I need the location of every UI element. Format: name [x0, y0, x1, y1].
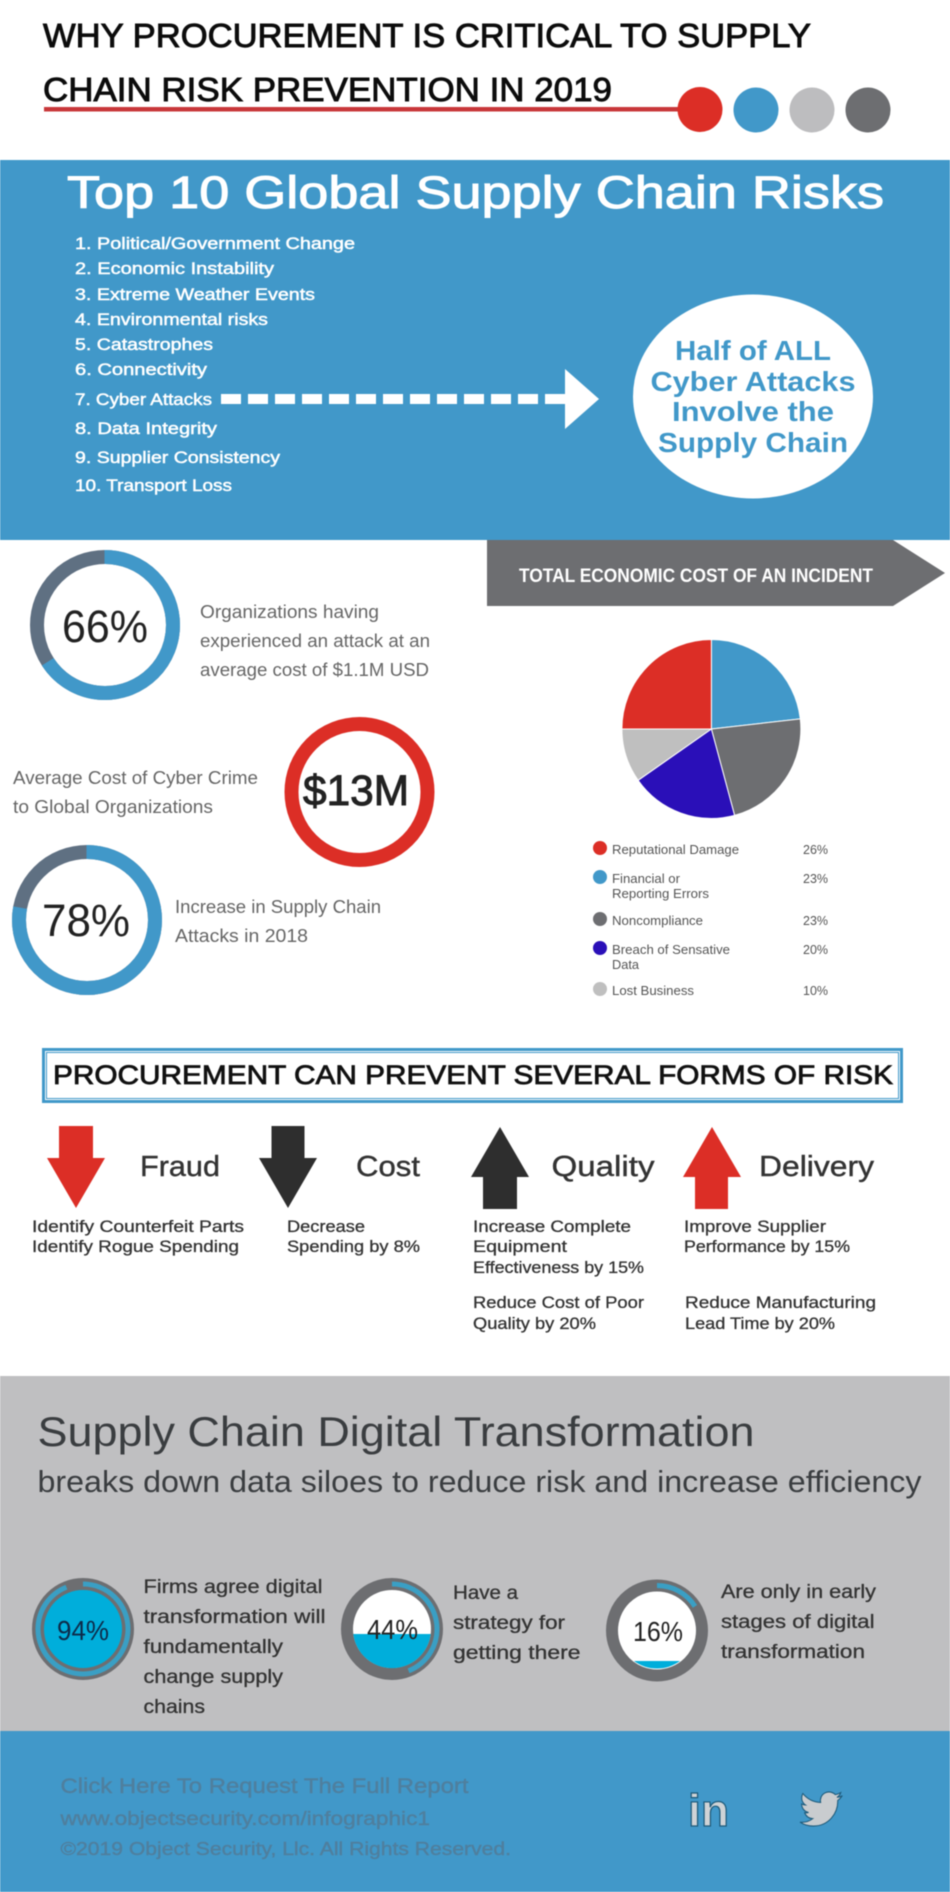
pie legend: Breach of Sensative — [612, 942, 730, 957]
text: 94 percent description — [144, 1577, 326, 1718]
risk list: 5. Catastrophes — [75, 335, 213, 354]
gauge: 16 percent — [612, 1586, 702, 1676]
gauge: 16 percent: 16% — [633, 1616, 683, 1647]
gauge: 44 percent — [347, 1584, 437, 1674]
text: delivery details: Reduce Manufacturing — [685, 1293, 876, 1312]
stat: 13M cost — [13, 724, 428, 860]
pie legend: 10% — [803, 983, 828, 998]
text: footer links — [59, 1775, 511, 1859]
text: 16 percent description: transformation — [721, 1642, 865, 1663]
pie legend: Lost Business — [612, 983, 695, 998]
text: 66 percent description: Organizations having — [200, 602, 379, 622]
text: 94 percent description: change supply — [144, 1667, 284, 1688]
text: delivery details — [684, 1217, 876, 1333]
risk list — [75, 234, 355, 495]
heading: procurement can prevent risk — [44, 1050, 902, 1102]
risk list: 2. Economic Instability — [75, 259, 275, 278]
text: quality details: Effectiveness by 15% — [473, 1258, 644, 1277]
gauge: 44 percent: 44% — [367, 1614, 418, 1645]
text: 94 percent description: transformation will — [144, 1607, 326, 1628]
gauge: 94 percent — [38, 1584, 128, 1674]
risk list: 3. Extreme Weather Events — [75, 285, 315, 304]
panel: top 10 risks — [0, 160, 950, 540]
stat: 66 percent — [37, 557, 430, 693]
arrow: dashed pointing to callout — [221, 369, 599, 429]
text: 94 percent description: chains — [144, 1697, 205, 1718]
text: 16 percent description: stages of digital — [721, 1612, 874, 1633]
pie legend: Noncompliance — [612, 913, 703, 928]
heading: digital transformation: Supply Chain Digital Transformation — [38, 1408, 755, 1455]
title: WHY PROCUREMENT IS CRITICAL TO SUPPLY — [43, 17, 811, 54]
banner: total economic cost — [487, 540, 945, 606]
text: 66 percent description — [200, 602, 430, 680]
text: 94 percent description: Firms agree digital — [144, 1577, 322, 1598]
text: quality details — [473, 1217, 644, 1333]
text: 94 percent description: fundamentally — [144, 1637, 284, 1658]
heading: top 10 risks: Top 10 Global Supply Chain Risks — [67, 167, 884, 218]
text: cost details: Spending by 8% — [287, 1237, 420, 1256]
text: delivery details: Improve Supplier — [684, 1217, 826, 1236]
arrow: delivery up — [683, 1127, 741, 1209]
stat: 13M cost: $13M — [303, 767, 409, 815]
text: footer links: www.objectsecurity.com/infographic1 — [59, 1809, 430, 1830]
stat: 78 percent — [19, 852, 381, 988]
title underline — [44, 107, 684, 112]
pie legend: Financial or — [612, 871, 681, 886]
arrow: quality up — [471, 1127, 529, 1209]
stat: 78 percent: 78% — [42, 895, 130, 946]
text: 44 percent description: Have a — [453, 1583, 518, 1604]
text: delivery details: Performance by 15% — [684, 1237, 850, 1256]
risk column: quality: Quality — [552, 1151, 655, 1183]
text: quality details: Increase Complete — [473, 1217, 631, 1236]
risk list: 4. Environmental risks — [75, 310, 268, 329]
risk column: fraud — [32, 1126, 244, 1256]
text: 66 percent description: experienced an attack at an — [200, 631, 430, 651]
pie legend: 23% — [803, 913, 828, 928]
text: 66 percent description: average cost of $1.1M USD — [200, 660, 429, 680]
pie legend: 23% — [803, 871, 828, 886]
header — [43, 17, 890, 132]
text: 44 percent description: getting there — [453, 1643, 580, 1664]
risk column: quality — [471, 1127, 655, 1333]
text: 13M description: Average Cost of Cyber Crime — [13, 768, 258, 788]
text: 44 percent description: strategy for — [453, 1613, 566, 1634]
panel: digital transformation — [0, 1376, 950, 1731]
risk list: 9. Supplier Consistency — [75, 448, 281, 467]
risk column: delivery: Delivery — [759, 1151, 875, 1183]
text: cost details: Decrease — [287, 1217, 365, 1236]
icon: twitter — [800, 1792, 842, 1826]
arrow: fraud down — [47, 1126, 105, 1208]
icon: linkedin: in — [688, 1785, 729, 1836]
pie legend: Reputational Damage — [612, 842, 739, 857]
risk list: 7. Cyber Attacks — [75, 390, 212, 409]
text: fraud details — [32, 1217, 244, 1256]
text: footer links: ©2019 Object Security, Llc. All Rights Reserved. — [60, 1839, 511, 1859]
risk list: 10. Transport Loss — [75, 476, 232, 495]
stat: 66 percent: 66% — [62, 601, 148, 652]
pie legend: 20% — [803, 942, 828, 957]
text: 13M description — [13, 768, 258, 817]
pie legend — [593, 841, 828, 998]
text: quality details: Reduce Cost of Poor — [473, 1293, 644, 1312]
text: 78 percent description: Increase in Supply Chain — [175, 897, 381, 917]
callout: half of all cyber attacks: Involve the — [672, 396, 834, 427]
gauge: 94 percent: 94% — [57, 1615, 109, 1646]
callout: half of all cyber attacks: Supply Chain — [658, 427, 848, 458]
callout: half of all cyber attacks — [633, 294, 873, 498]
panel: footer — [0, 1731, 950, 1892]
callout: half of all cyber attacks: Half of ALL — [675, 335, 831, 366]
pie legend: Reporting Errors — [612, 886, 710, 901]
pie legend: 26% — [803, 842, 828, 857]
text: 13M description: to Global Organizations — [13, 797, 213, 817]
text: fraud details: Identify Rogue Spending — [32, 1237, 239, 1256]
text: 16 percent description: Are only in early — [721, 1582, 877, 1603]
risk column: cost: Cost — [356, 1151, 420, 1183]
pie chart — [622, 640, 801, 818]
heading: procurement can prevent risk: PROCUREMENT CAN PREVENT SEVERAL FORMS OF RISK — [53, 1060, 893, 1090]
pie legend: Data — [612, 957, 640, 972]
text: 44 percent description — [453, 1583, 580, 1664]
risk column: cost — [259, 1126, 420, 1256]
decorative colour dots — [678, 87, 890, 132]
arrow: cost down — [259, 1126, 317, 1208]
risk column: delivery — [683, 1127, 876, 1333]
text: footer links: Click Here To Request The Full Report — [60, 1775, 469, 1798]
title: CHAIN RISK PREVENTION IN 2019 — [43, 71, 612, 108]
risk column: fraud: Fraud — [140, 1151, 220, 1183]
callout: half of all cyber attacks: Cyber Attacks — [650, 366, 856, 397]
text: delivery details: Lead Time by 20% — [685, 1314, 835, 1333]
risk list: 6. Connectivity — [75, 360, 208, 379]
text: cost details — [287, 1217, 420, 1256]
text: fraud details: Identify Counterfeit Parts — [32, 1217, 244, 1236]
text: 78 percent description — [175, 897, 381, 946]
text: 16 percent description — [721, 1582, 877, 1663]
text: quality details: Quality by 20% — [473, 1314, 596, 1333]
title — [43, 17, 811, 108]
text: quality details: Equipment — [473, 1237, 567, 1256]
risk list: 8. Data Integrity — [75, 419, 218, 438]
subheading: breaks down data siloes to reduce risk and increase efficiency — [38, 1464, 922, 1499]
risk list: 1. Political/Government Change — [75, 234, 355, 253]
text: 78 percent description: Attacks in 2018 — [175, 926, 308, 946]
banner: total economic cost: TOTAL ECONOMIC COST OF AN INCIDENT — [519, 566, 873, 587]
